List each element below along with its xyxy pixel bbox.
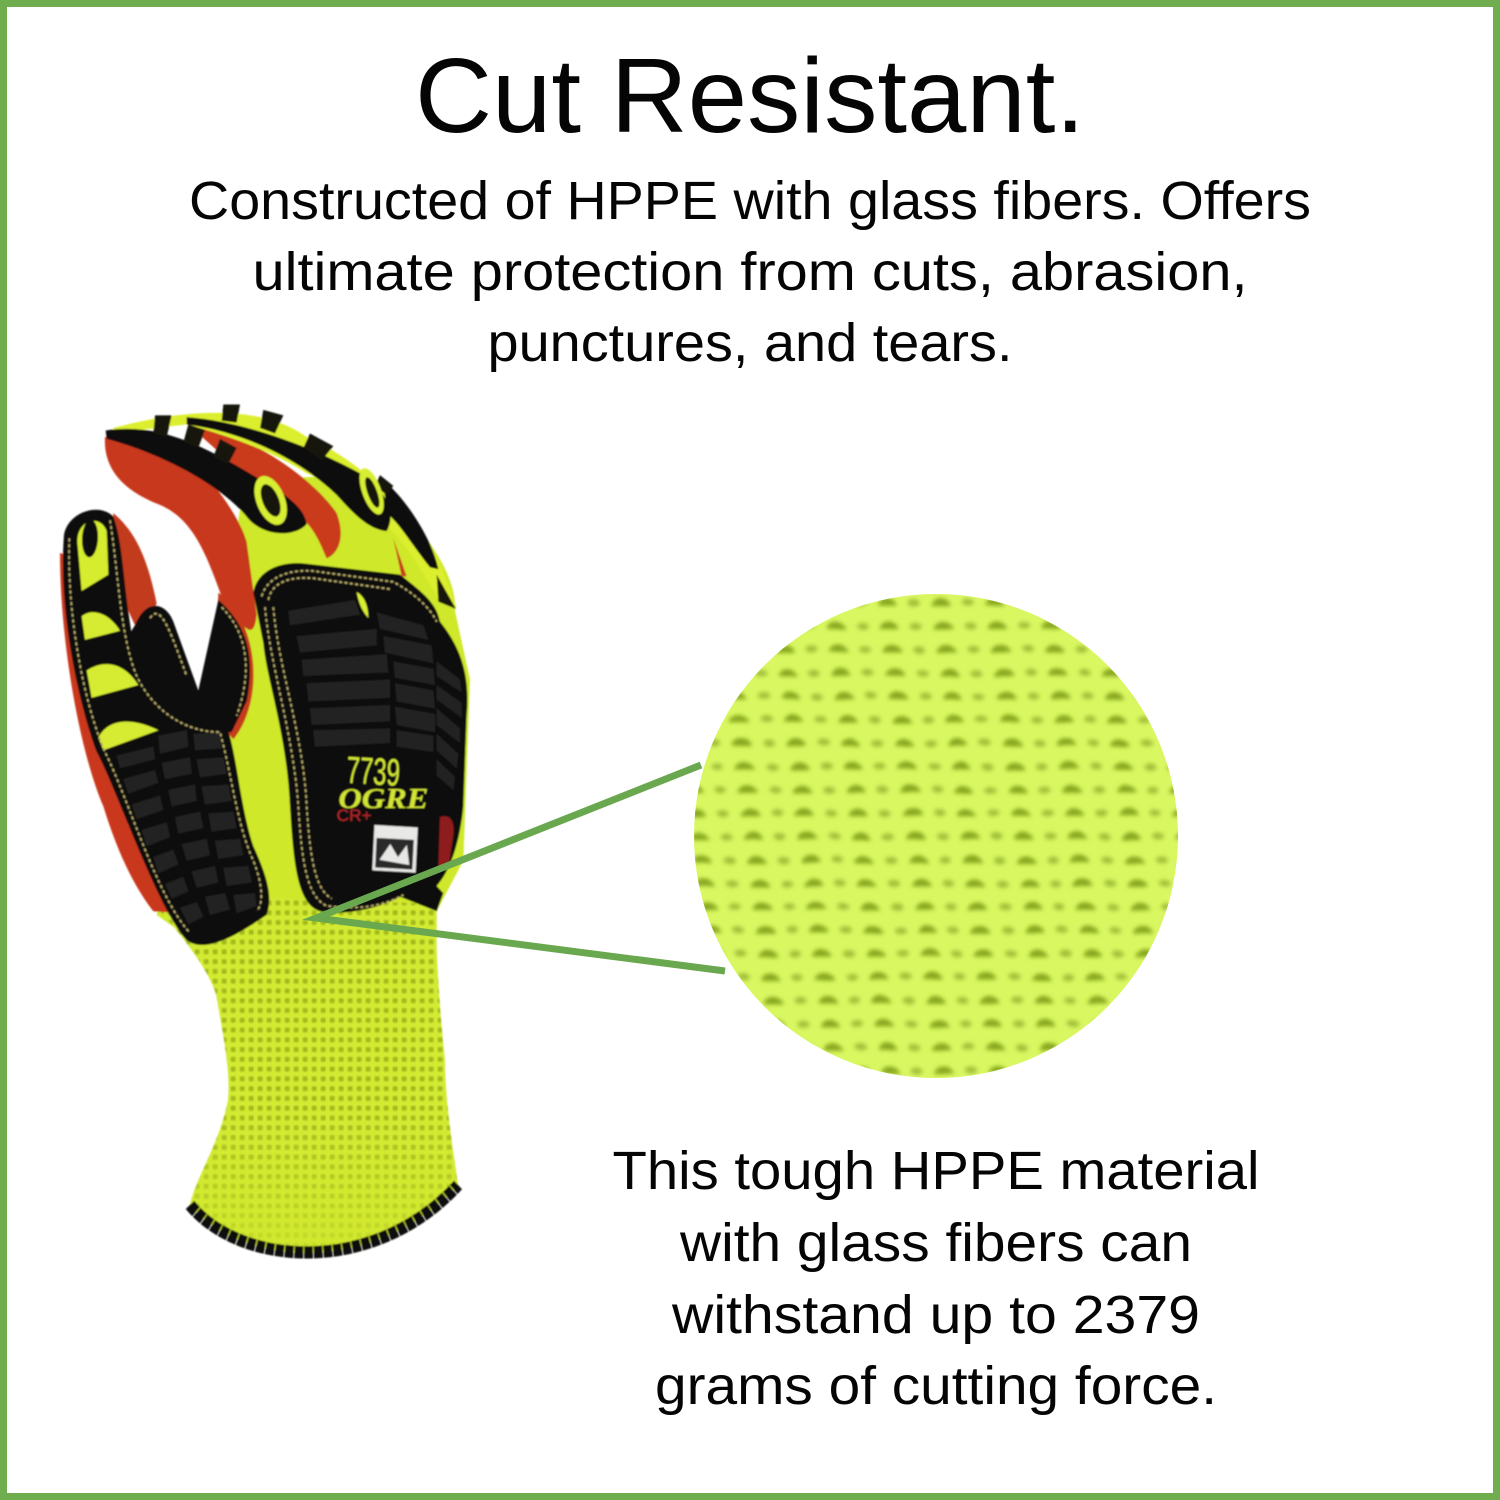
glove illustration	[60, 404, 470, 1252]
thumb yellow tip	[77, 521, 108, 591]
ring finger guard	[383, 480, 438, 569]
glove knit body	[157, 477, 470, 984]
intro text block: ultimate protection from cuts, abrasion,	[252, 242, 1248, 302]
red web	[213, 593, 254, 739]
pad ribs	[288, 600, 462, 790]
pinky guard	[437, 575, 456, 609]
material description text block	[612, 1141, 1260, 1416]
intro text block: punctures, and tears.	[488, 313, 1012, 373]
title: Cut Resistant.	[415, 37, 1085, 155]
index finger guard	[106, 429, 307, 533]
glove cuff	[153, 897, 458, 1252]
red ring finger sliver	[393, 538, 407, 576]
intro text block	[189, 171, 1311, 373]
red thumb tip	[110, 513, 157, 636]
yellow finger ridges	[113, 413, 457, 607]
pad yellow notch	[357, 592, 368, 618]
magnified fabric circle	[694, 594, 1178, 1078]
CR+ mark: CR+	[337, 807, 372, 825]
thumb pad ribs	[117, 730, 257, 924]
dark ridge bars on knuckles	[153, 404, 393, 495]
pad stitching	[262, 571, 437, 907]
intro text block: Constructed of HPPE with glass fibers. Offers	[189, 171, 1311, 231]
back of hand pad	[253, 563, 467, 913]
index fingertip loop	[248, 470, 293, 530]
material description text block: with glass fibers can	[679, 1213, 1192, 1273]
cuff lower band	[190, 1107, 458, 1252]
material description text block: This tough HPPE material	[612, 1141, 1260, 1201]
callout lines	[316, 765, 725, 971]
model number: 7739	[346, 748, 401, 794]
thumb yellow ridges	[82, 612, 158, 750]
cut rating label	[372, 825, 418, 873]
red side tab	[438, 816, 454, 868]
cuff hem	[190, 1185, 458, 1252]
red palm edge	[60, 553, 200, 915]
web black patch	[123, 600, 250, 734]
material description text block: grams of cutting force.	[655, 1356, 1217, 1416]
thumb guard	[63, 510, 269, 945]
red middle finger	[190, 426, 341, 558]
middle fingertip loop	[355, 465, 389, 518]
brand name: OGRE	[338, 783, 428, 814]
red index finger	[105, 437, 257, 630]
material description text block: withstand up to 2379	[671, 1285, 1200, 1345]
middle finger guard	[187, 417, 390, 531]
thumb stitching	[69, 520, 261, 933]
